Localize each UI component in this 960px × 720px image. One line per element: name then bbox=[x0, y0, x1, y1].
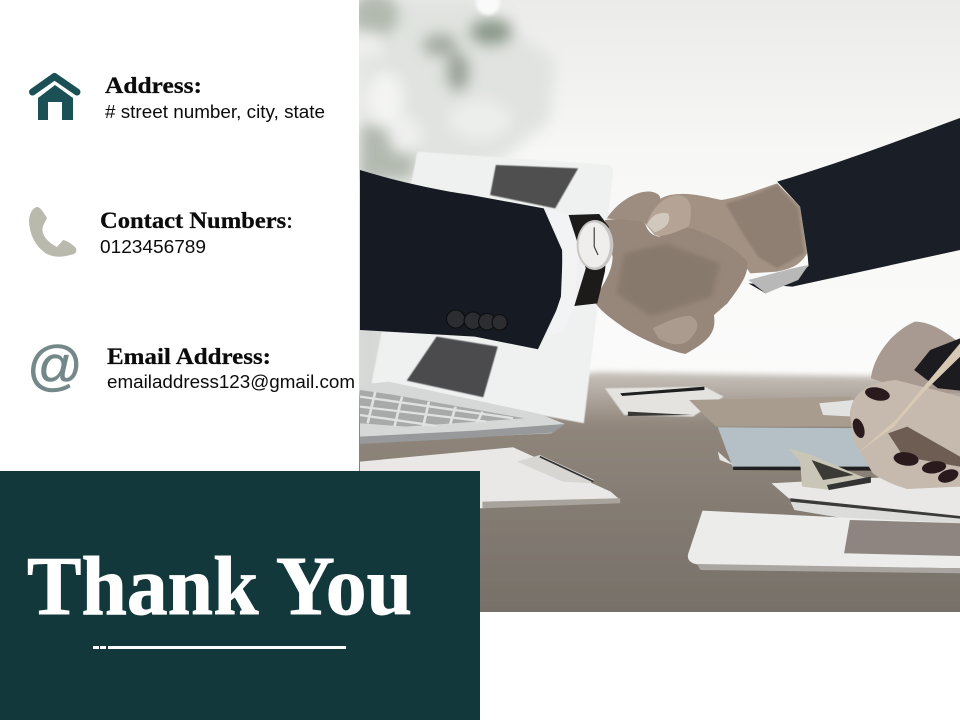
writing hand holding a pen bbox=[850, 322, 960, 489]
underline rule bbox=[93, 646, 346, 649]
address block: # street number, city, state bbox=[105, 102, 325, 122]
tablet and papers at right bbox=[688, 477, 960, 573]
address block: Address: bbox=[105, 73, 202, 98]
contact numbers block: Contact Numbers : bbox=[100, 208, 293, 233]
wristwatch bbox=[569, 214, 613, 306]
clipboard bbox=[360, 447, 620, 508]
email block: emailaddress123@gmail.com bbox=[107, 372, 355, 392]
shirt cuff bbox=[556, 259, 563, 312]
pen and papers on the table bbox=[605, 387, 873, 471]
title: Thank You bbox=[27, 540, 412, 633]
panel: thank you bbox=[0, 471, 480, 720]
icon: house bbox=[32, 76, 77, 120]
email block bbox=[107, 344, 355, 392]
icon: telephone bbox=[29, 207, 76, 257]
binder clip bbox=[789, 448, 871, 490]
left suit sleeve bbox=[360, 170, 563, 349]
contact numbers block bbox=[100, 208, 293, 257]
icon: at sign: @ bbox=[27, 334, 83, 396]
left clasping hand bbox=[593, 192, 747, 354]
photo: business handshake over a meeting table bbox=[340, 0, 960, 640]
right arm and hand bbox=[645, 183, 807, 273]
address block bbox=[105, 73, 325, 122]
table top bbox=[359, 369, 960, 612]
email block: Email Address: bbox=[107, 344, 271, 369]
contact numbers block: 0123456789 bbox=[100, 237, 206, 257]
right suit sleeve bbox=[748, 118, 960, 293]
laptop bbox=[360, 152, 613, 444]
